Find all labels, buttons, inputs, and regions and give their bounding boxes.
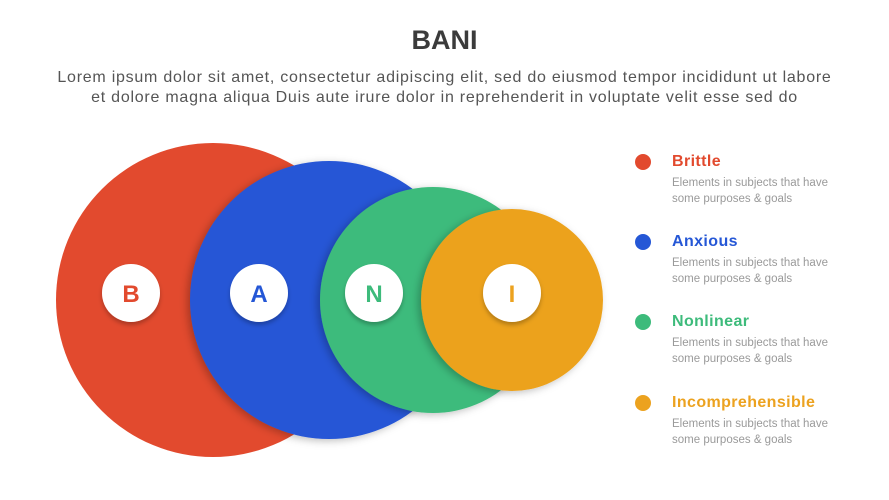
circle: I [421,209,603,391]
label B [102,264,160,322]
legend: Incomprehensible: some purposes & goals [672,434,792,446]
circle: N [320,187,546,413]
legend: Nonlinear [635,313,828,365]
label I: I [509,281,515,308]
legend: Anxious [635,233,828,285]
title: BANI [412,25,478,55]
label A [230,264,288,322]
label N: N [365,281,383,308]
legend: Anxious: Anxious [672,233,738,250]
legend: Brittle [635,153,828,205]
label I [483,264,541,322]
legend: Incomprehensible: Elements in subjects that have [672,418,828,430]
legend: Nonlinear: some purposes & goals [672,353,792,365]
legend: Anxious: Elements in subjects that have [672,257,828,269]
label A: A [250,281,268,308]
label N [345,264,403,322]
subtitle: et dolore magna aliqua Duis aute irure dolor in reprehenderit in voluptate velit esse sed do [91,89,798,106]
legend: Nonlinear: Nonlinear [672,313,749,330]
legend: Nonlinear: Elements in subjects that have [672,337,828,349]
legend: Brittle: some purposes & goals [672,193,792,205]
label B: B [122,281,140,308]
circle: A [190,161,468,439]
legend: Incomprehensible: Incomprehensible [672,394,815,411]
subtitle: Lorem ipsum dolor sit amet, consectetur adipiscing elit, sed do eiusmod tempor incididunt ut labore [57,69,832,86]
circle: B [56,143,370,457]
legend: Incomprehensible [635,394,828,446]
legend: Brittle: Elements in subjects that have [672,177,828,189]
legend: Brittle: Brittle [672,153,721,170]
legend: Anxious: some purposes & goals [672,273,792,285]
subtitle [57,69,832,106]
